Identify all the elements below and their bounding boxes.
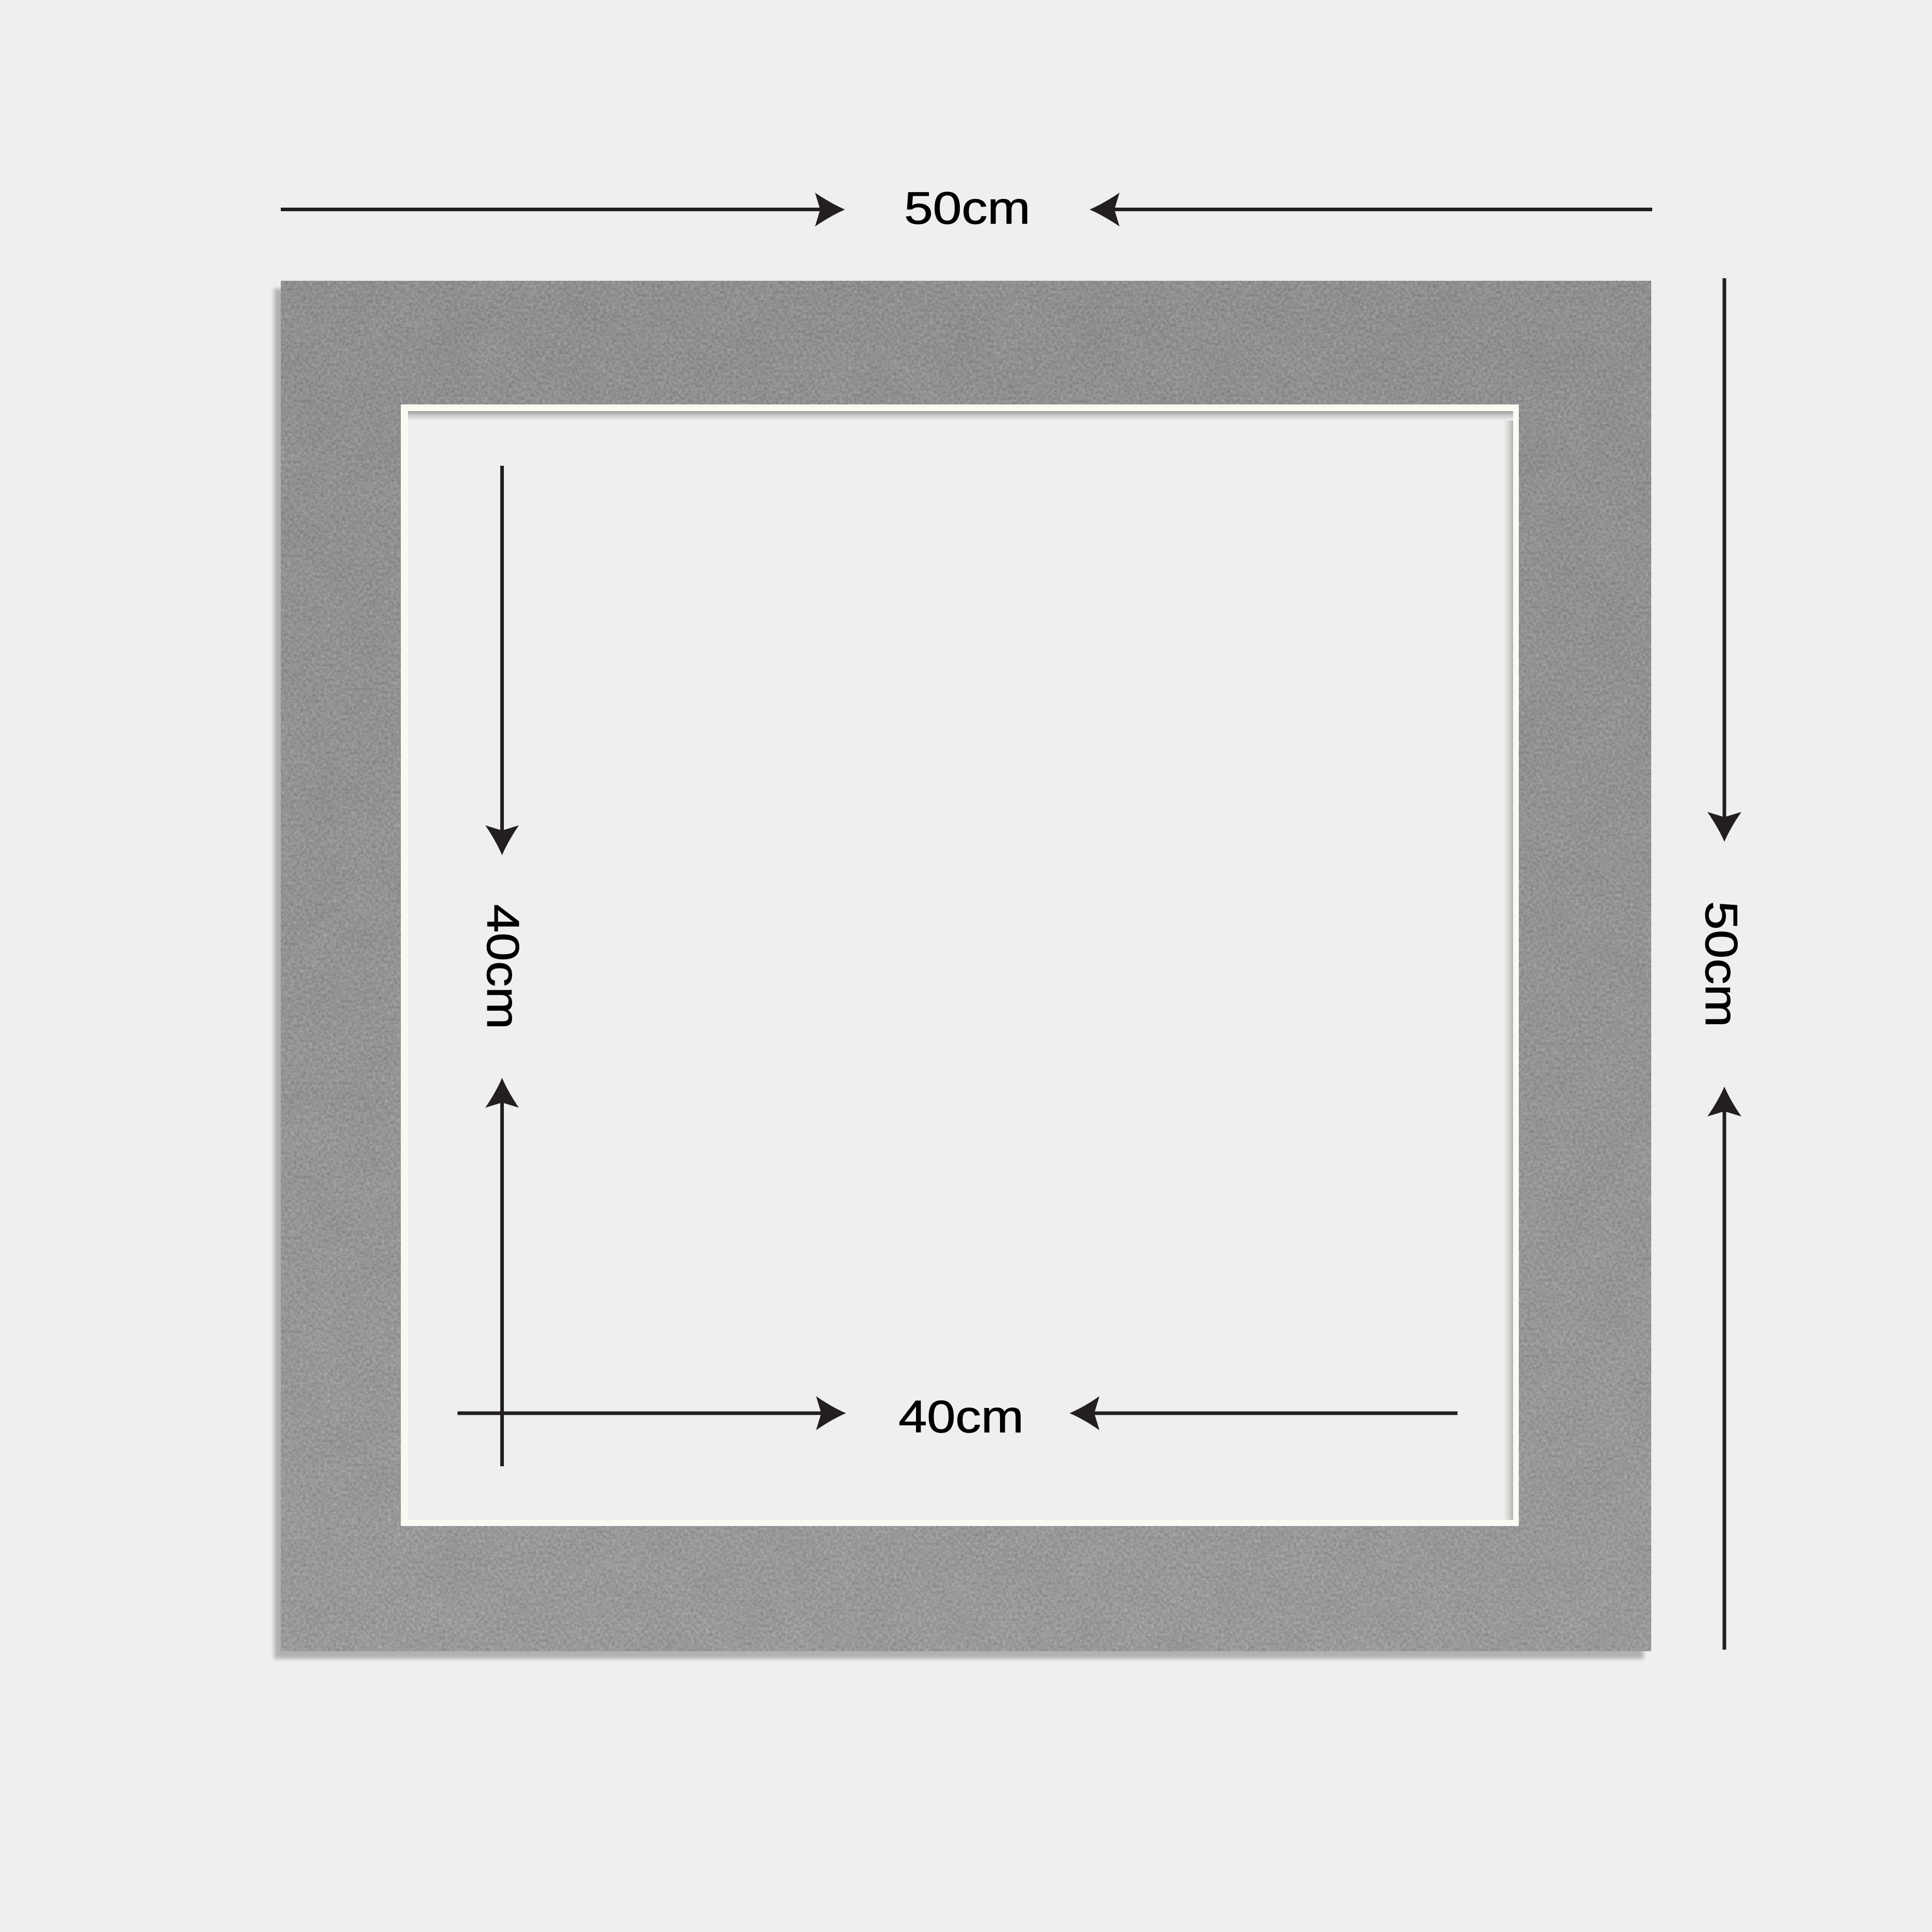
right dimension: 50cm (1696, 278, 1747, 1650)
arrow: top left pointing right (281, 193, 845, 227)
label: 40cm inner bottom: 40cm (899, 1391, 1024, 1442)
inner shadow top (408, 411, 1513, 420)
arrow: inner left pointing down (485, 466, 519, 855)
label: 50cm right: 50cm (1696, 901, 1747, 1027)
arrow: top right pointing left (1090, 193, 1652, 227)
inner bottom dimension: 40cm (457, 1391, 1458, 1442)
top dimension: 50cm (281, 182, 1652, 233)
window opening (401, 404, 1519, 1526)
arrow: right side pointing up (1707, 1087, 1741, 1650)
arrow: inner left pointing up (485, 1078, 519, 1466)
mount drop shadow (274, 289, 1643, 1659)
arrow: inner bottom pointing left (1070, 1396, 1458, 1430)
panel: grey mount board with window (274, 281, 1651, 1659)
inner shadow right (1503, 411, 1513, 1520)
label: 40cm inner left: 40cm (478, 904, 529, 1029)
arrow: inner bottom pointing right (457, 1396, 846, 1430)
window opening surface (408, 411, 1513, 1520)
inner left dimension: 40cm (478, 466, 529, 1466)
arrow: right side pointing down (1707, 278, 1741, 842)
bevel edge (401, 404, 1519, 1526)
label: 50cm top: 50cm (904, 182, 1030, 233)
mount board surface (281, 281, 1651, 1651)
